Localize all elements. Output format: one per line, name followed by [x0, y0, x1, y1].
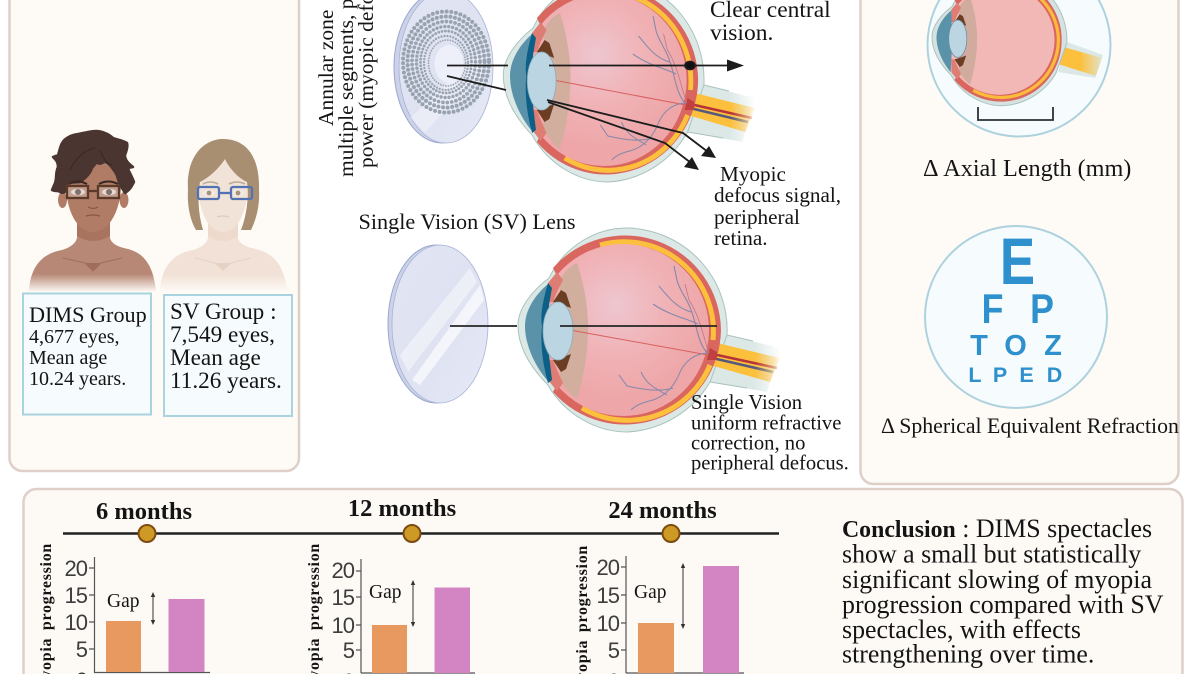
icon: eye chart: D — [1047, 363, 1062, 387]
heading: 12 months: 12 months — [348, 495, 456, 522]
icon: eye chart: T — [970, 330, 988, 362]
conclusion text: significant slowing of myopia — [842, 565, 1152, 594]
icon: eye chart — [925, 224, 1107, 408]
icon: eye chart: F — [982, 286, 1003, 333]
bar chart: 12 months: Gap — [369, 582, 402, 603]
DIMS group box: 10.24 years. — [29, 368, 126, 390]
bar chart: 24 months: Gap — [634, 582, 666, 603]
conclusion text: : DIMS spectacles — [956, 514, 1152, 543]
panel: timeline results — [24, 489, 1182, 674]
icon: axial length eye — [928, 0, 1110, 136]
DIMS group box: Mean age — [29, 347, 107, 369]
conclusion text: strengthening over time. — [842, 640, 1094, 668]
SV group box: Mean age — [170, 345, 261, 371]
DIMS group box: DIMS Group — [29, 302, 147, 327]
label: myopic defocus signal: Myopic — [720, 162, 786, 186]
bar chart: 6 months: 5 — [76, 637, 88, 662]
SV lens — [388, 245, 488, 403]
heading: 24 months: 24 months — [608, 497, 717, 524]
bar chart: 6 months — [38, 543, 210, 674]
heading: 6 months: 6 months — [96, 498, 192, 525]
DIMS lens — [394, 0, 493, 143]
bar chart: 6 months: 20 — [65, 556, 88, 581]
icon: SV child — [160, 139, 287, 291]
icon: eye chart: Z — [1044, 330, 1062, 362]
panel: outcomes — [860, 0, 1178, 484]
bar chart: 24 months: 20 — [597, 555, 620, 580]
icon: eye chart: E — [1019, 363, 1034, 387]
bar chart: 24 months: 15 — [597, 583, 620, 608]
bar chart: 24 months: 10 — [597, 611, 620, 636]
label: single vision description: correction, no — [691, 432, 805, 454]
icon: eye chart: E — [1000, 224, 1035, 298]
bar chart: 6 months: 15 — [65, 583, 88, 608]
annular zone label — [314, 0, 378, 177]
bar chart: 24 months: 5 — [608, 638, 620, 663]
label: myopic defocus signal: peripheral — [714, 205, 800, 229]
conclusion text: spectacles, with effects — [842, 615, 1081, 644]
label: spherical equivalent refraction: Δ Spherical Equivalent Refraction — [881, 414, 1179, 438]
bar chart: 24 months — [574, 545, 744, 674]
bar chart: 12 months: 15 — [332, 585, 355, 610]
DIMS group box: 4,677 eyes, — [29, 326, 120, 348]
annular zone label: Annular zone — [314, 10, 338, 126]
SV group box: 11.26 years. — [170, 368, 282, 394]
arrows: DIMS light paths — [447, 60, 744, 170]
icon: eye chart: P — [1030, 286, 1054, 333]
bar chart: 6 months: Gap — [107, 591, 140, 612]
SV group box: SV Group : — [170, 299, 277, 325]
label: single vision description: Single Vision — [691, 392, 802, 414]
conclusion text: progression compared with SV — [842, 590, 1164, 619]
icon: DIMS child — [29, 131, 156, 291]
label: single vision description: uniform refractive — [691, 412, 841, 434]
SV group box — [164, 295, 292, 416]
label: clear central vision: vision. — [710, 20, 773, 46]
heading: single vision lens: Single Vision (SV) Lens — [358, 209, 576, 234]
icon: eye chart: O — [1004, 330, 1027, 362]
timeline — [63, 525, 779, 542]
label: single vision description: peripheral defocus. — [691, 452, 849, 474]
eye: DIMS — [503, 0, 755, 182]
conclusion text: show a small but statistically — [842, 540, 1141, 568]
bar chart: 6 months: 10 — [65, 610, 88, 635]
label: myopic defocus signal: retina. — [714, 226, 768, 250]
icon: eye chart: P — [993, 363, 1007, 387]
label: myopic defocus signal: defocus signal, — [714, 183, 841, 207]
icon: eye chart: L — [968, 363, 982, 387]
bar chart: 12 months: 5 — [343, 638, 355, 663]
SV group box: 7,549 eyes, — [170, 322, 275, 348]
bar chart: 12 months — [306, 543, 475, 674]
conclusion text: Conclusion — [842, 517, 956, 543]
eye: SV — [518, 228, 780, 432]
lines: SV light path — [450, 325, 717, 327]
bar chart: 12 months: 20 — [332, 558, 355, 583]
bar chart: 12 months: 10 — [332, 613, 355, 638]
panel: study groups — [10, 0, 299, 471]
label: axial length: Δ Axial Length (mm) — [923, 155, 1131, 182]
DIMS group box — [23, 294, 151, 414]
